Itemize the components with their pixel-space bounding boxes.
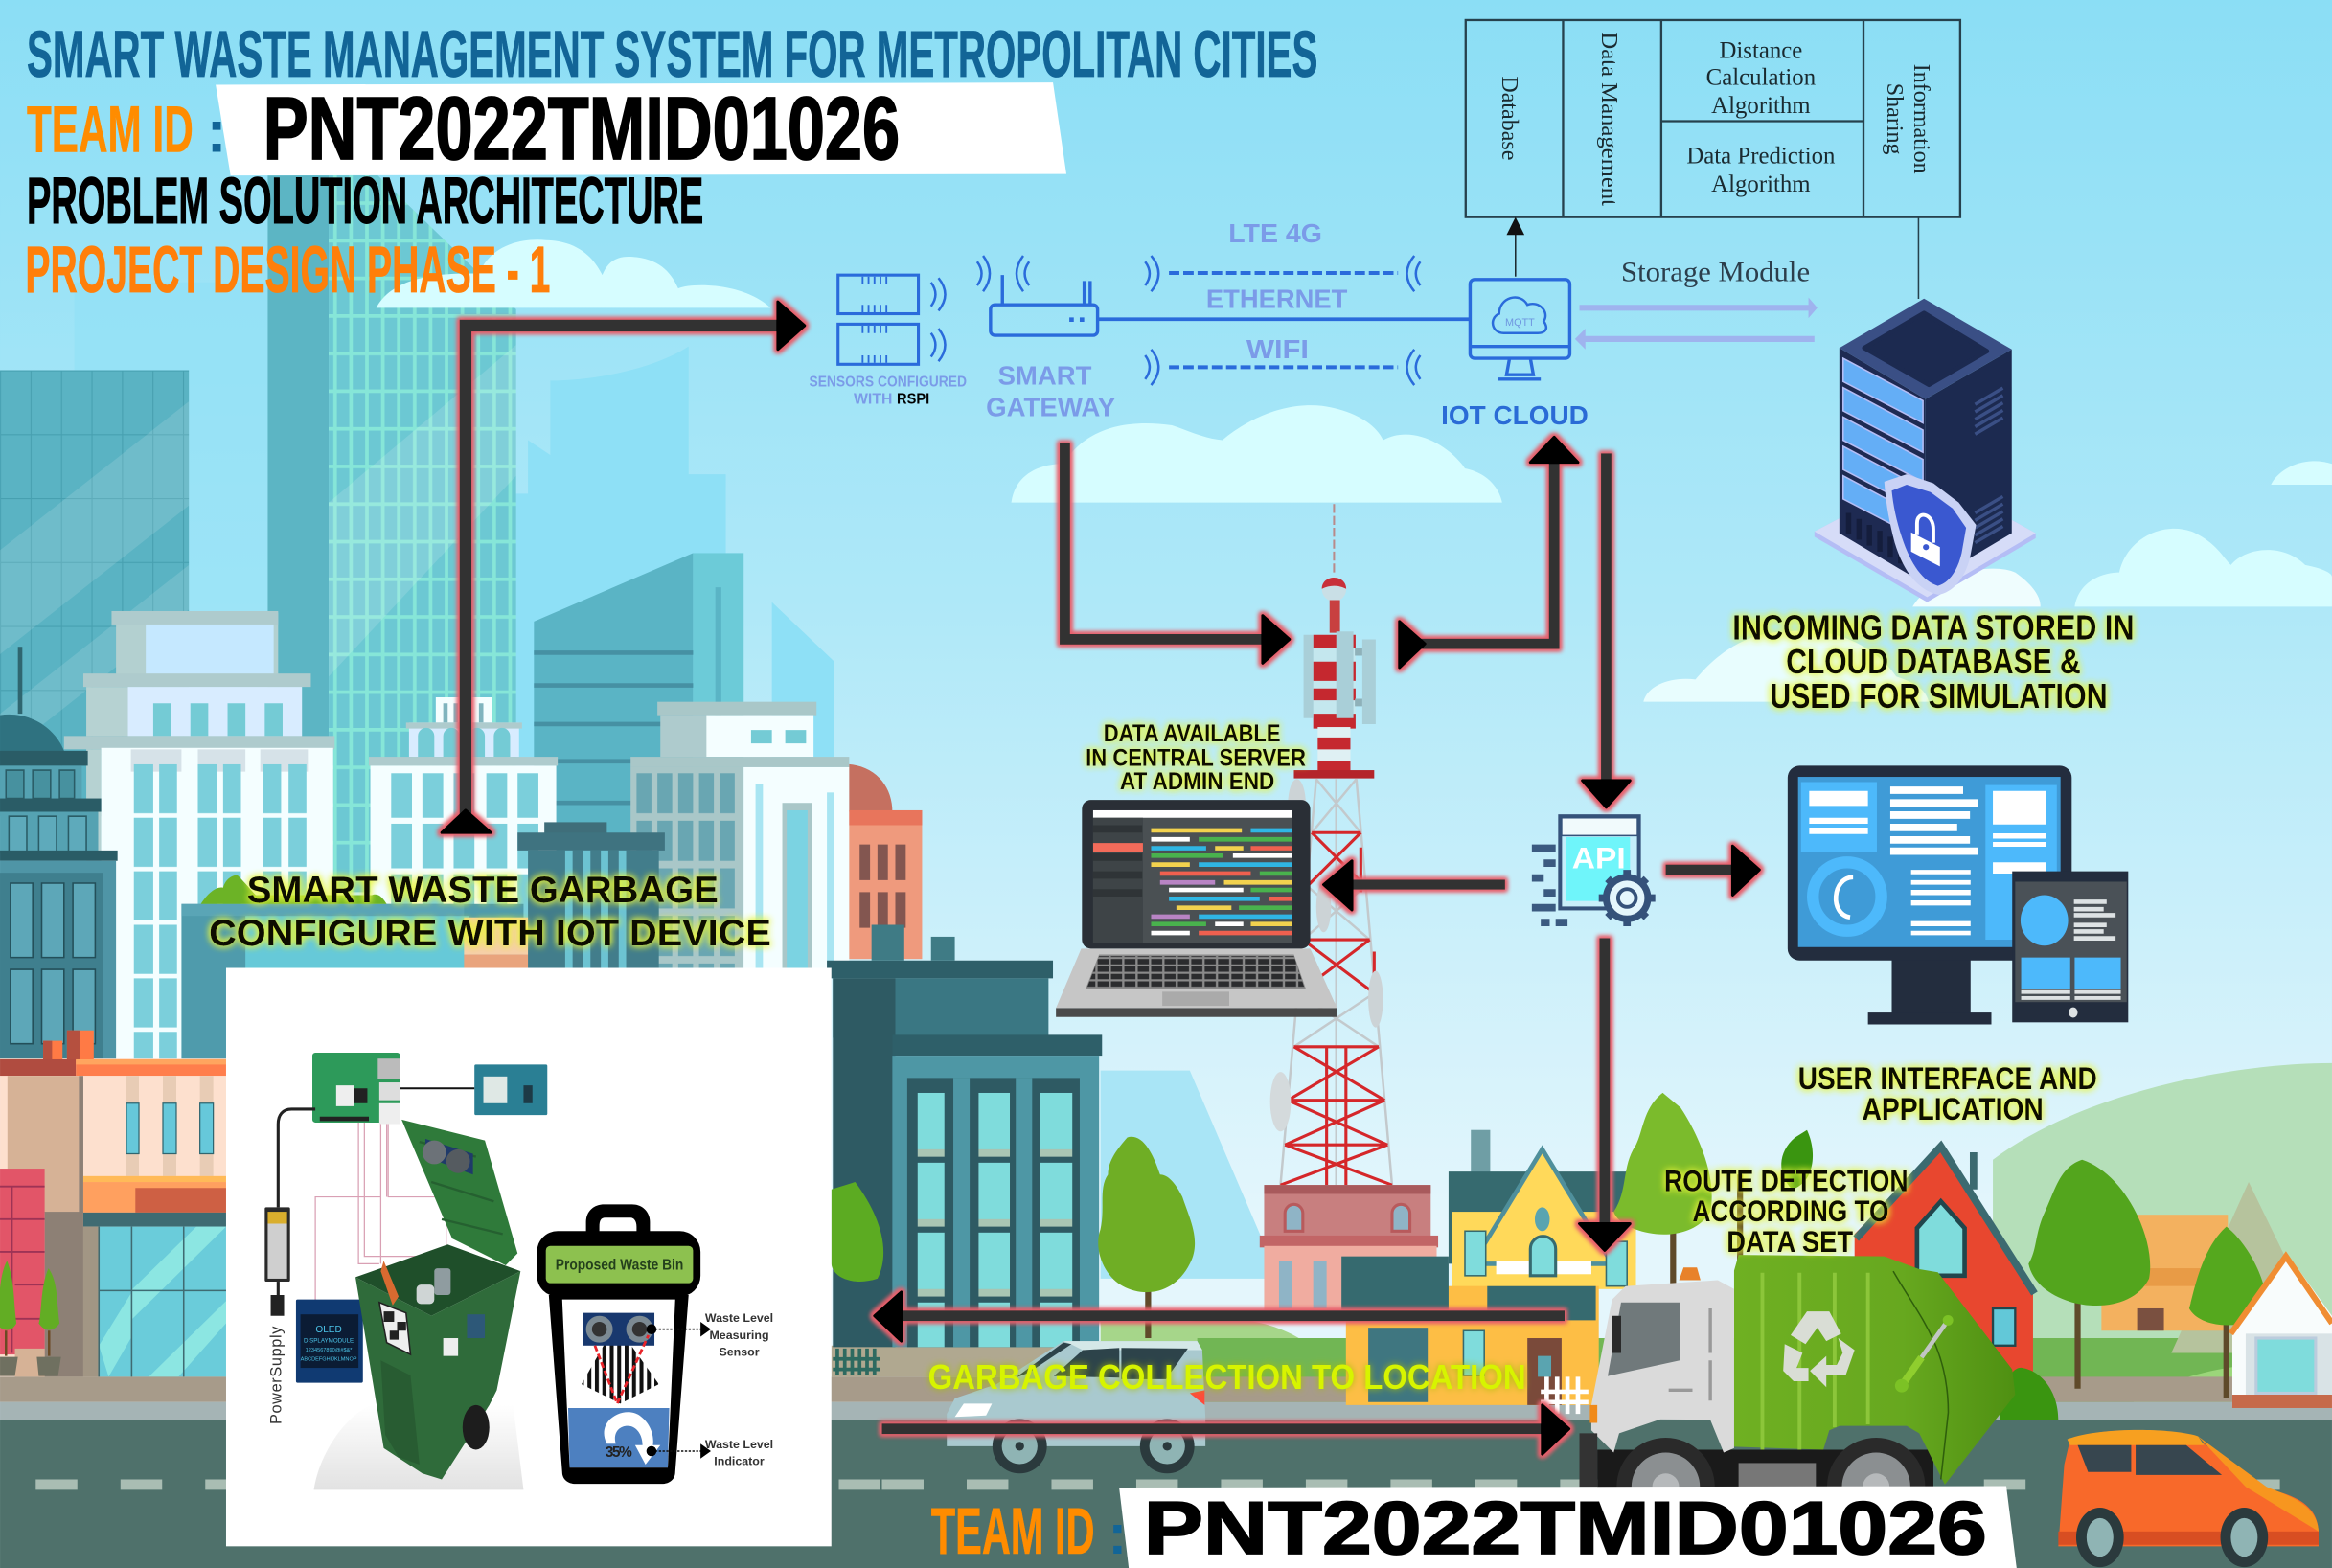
tan wall [8, 1076, 79, 1213]
smart gateway router icon [977, 256, 1470, 335]
laptop with code [1056, 800, 1337, 1017]
route detection caption: DATA SET [1726, 1225, 1853, 1259]
user interface caption [1798, 1060, 2097, 1126]
orange car [2058, 1430, 2319, 1567]
subtitle project design phase: PROJECT DESIGN PHASE - 1 [25, 234, 550, 307]
car windows [1016, 1343, 1188, 1379]
user interface caption: APPLICATION [1862, 1091, 2044, 1126]
orange building [849, 764, 922, 959]
network labels [1206, 218, 1347, 364]
teal tower block [827, 924, 1102, 1376]
garbage collection caption: GARBAGE COLLECTION TO LOCATION [928, 1358, 1526, 1397]
street trees [832, 1093, 2267, 1420]
team id label: TEAM ID [27, 93, 194, 166]
information sharing cell: Information [1909, 64, 1933, 174]
ground and road [0, 1376, 2332, 1568]
user interface caption: USER INTERFACE AND [1798, 1060, 2097, 1096]
sensors configured label: RSPI [897, 391, 929, 407]
power supply label: PowerSupply [267, 1326, 285, 1424]
white house right [2230, 1252, 2332, 1408]
proposed waste bin icon: 35% [606, 1444, 632, 1461]
desktop monitor and tablet [1788, 765, 2128, 1024]
garbage truck [1580, 1255, 2015, 1535]
shield [1885, 474, 1977, 595]
distance algorithm cell: Calculation [1706, 64, 1817, 90]
OLED display: 1234567890@#$&* [306, 1348, 353, 1353]
data management cell: Data Management [1596, 32, 1621, 206]
sensors icon [838, 275, 945, 364]
body ribs [1762, 1273, 1868, 1449]
incoming data caption: INCOMING DATA STORED IN [1732, 608, 2135, 647]
proposed waste bin icon [537, 1204, 711, 1484]
smart waste garbage caption [209, 870, 771, 954]
smart gateway label: GATEWAY [986, 393, 1116, 422]
team id banner background [216, 82, 1066, 175]
network labels: WIFI [1246, 334, 1309, 364]
team id value: PNT2022TMID01026 [263, 79, 900, 178]
red building [0, 1169, 45, 1354]
power cable and adapter [264, 1109, 315, 1316]
information sharing cell [1882, 64, 1933, 174]
chimneys [43, 1031, 94, 1060]
slanted mid building [534, 553, 743, 924]
OLED display: DISPLAYMODULE [304, 1338, 354, 1345]
potted trees [0, 1261, 59, 1329]
laptop base [1056, 948, 1337, 1008]
title: SMART WASTE MANAGEMENT SYSTEM FOR METROPOLITAN CITIES [27, 18, 1317, 91]
glass office tower left [0, 371, 189, 816]
distance algorithm cell: Algorithm [1711, 93, 1811, 119]
incoming data caption: USED FOR SIMULATION [1770, 677, 2108, 716]
indicator lamp [1589, 1405, 1597, 1423]
white building centre [369, 697, 558, 974]
sensors configured label: SENSORS CONFIGURED [809, 375, 967, 391]
wifi module [400, 1064, 547, 1115]
bin shadow [314, 1405, 523, 1489]
network labels: LTE 4G [1228, 218, 1322, 248]
proposed waste bin title: Proposed Waste Bin [556, 1258, 683, 1274]
street hills [1101, 1063, 2332, 1420]
panel: waste bin hardware [226, 968, 832, 1546]
OLED display: ABCDEFGHIJKLMNOP [301, 1356, 357, 1362]
sensors configured label [809, 375, 967, 407]
route detection caption: ROUTE DETECTION [1664, 1164, 1909, 1197]
door details [1669, 1308, 1710, 1400]
sensors configured label: WITH [854, 391, 892, 407]
truck window [1608, 1303, 1680, 1376]
OLED display [296, 1300, 363, 1383]
IoT cloud monitor icon [1470, 280, 1569, 379]
truck underbody [1597, 1449, 1933, 1489]
sensor labels: Measuring [709, 1329, 769, 1342]
truck front wheel [1616, 1438, 1715, 1535]
drive bays [1843, 358, 1923, 540]
white building left [64, 611, 334, 1063]
bottom team id label: TEAM ID [931, 1495, 1094, 1568]
network labels: ETHERNET [1206, 284, 1347, 313]
storage arrows [1575, 297, 1818, 350]
rack vents [1975, 388, 2002, 543]
central server caption: AT ADMIN END [1120, 769, 1274, 795]
smart gateway label: SMART [998, 360, 1091, 390]
information sharing cell: Sharing [1882, 83, 1907, 155]
route detection caption [1664, 1164, 1909, 1259]
green smart bin [355, 1120, 520, 1479]
central server caption: DATA AVAILABLE [1104, 721, 1281, 747]
incoming data caption: CLOUD DATABASE & [1786, 643, 2081, 681]
distance algorithm cell: Distance [1719, 38, 1802, 64]
incoming data caption [1732, 608, 2135, 716]
arrow: truck to left [875, 1292, 1565, 1341]
code lines [1151, 829, 1292, 935]
low teal buildings [181, 822, 665, 1061]
pink building [1260, 1185, 1438, 1320]
sensor labels: Sensor [719, 1346, 760, 1359]
clouds [1012, 405, 2332, 702]
storage module label: Storage Module [1621, 257, 1810, 287]
smart waste garbage caption: SMART WASTE GARBAGE [247, 870, 719, 911]
line: table to server [1917, 217, 1919, 299]
arrow: bin to sensors [442, 302, 805, 832]
API gear icon [1532, 816, 1656, 926]
car wheels [993, 1419, 1195, 1473]
bottom team id value: PNT2022TMID01026 [1144, 1488, 1987, 1568]
headlight [955, 1403, 992, 1417]
flow arrows [442, 302, 1759, 1454]
coloured wires [315, 1123, 449, 1308]
arrow: API to laptop [1324, 861, 1505, 910]
mast [1333, 504, 1335, 576]
platform [1815, 473, 2036, 602]
red house [1855, 1147, 2035, 1375]
distance algorithm cell [1706, 38, 1817, 119]
subtitle problem solution architecture: PROBLEM SOLUTION ARCHITECTURE [27, 165, 703, 238]
team id colon: : [207, 99, 226, 165]
yellow house [1341, 1130, 1636, 1405]
bottom team id banner background [1119, 1486, 2017, 1568]
white building right [630, 702, 849, 975]
truck cab [1591, 1280, 1734, 1453]
central server caption [1086, 721, 1306, 795]
smart gateway label [986, 360, 1116, 422]
truck green body [1734, 1255, 2015, 1485]
arrow: cloud to API [1583, 453, 1630, 807]
truck rear wheel [1827, 1438, 1925, 1535]
beacon [1680, 1267, 1701, 1280]
lattice [1281, 779, 1392, 1185]
raspberry pi board [312, 1053, 400, 1124]
prediction algorithm cell: Algorithm [1711, 171, 1811, 197]
central skyscraper [267, 175, 516, 892]
far background buildings [0, 283, 1279, 1279]
dark teal dome building left [0, 647, 118, 1061]
arrow: cloud to database [1506, 217, 1524, 277]
padlock [1911, 533, 1940, 566]
arrow: API to route detection [1580, 938, 1630, 1250]
arrow: gateway to tower [1064, 443, 1290, 663]
grey car [947, 1341, 1205, 1473]
sensor labels: Indicator [714, 1455, 765, 1468]
server rack with shield [1815, 299, 2036, 602]
left street buildings [0, 1031, 226, 1376]
laptop screen [1082, 800, 1311, 948]
beacon ball [1322, 577, 1346, 602]
prediction algorithm cell [1686, 144, 1836, 197]
cloud behind project phase [377, 239, 770, 307]
roofline [0, 1059, 76, 1076]
IoT cloud label: IOT CLOUD [1441, 400, 1589, 430]
small orange house [2101, 1215, 2228, 1330]
prediction algorithm cell: Data Prediction [1686, 144, 1836, 170]
sensor labels: Waste Level [705, 1438, 773, 1451]
central server caption: IN CENTRAL SERVER [1086, 745, 1306, 771]
API label: API [1572, 842, 1626, 875]
database modules table [1466, 20, 1960, 217]
arrow: right to truck [882, 1405, 1569, 1454]
OLED display: OLED [315, 1325, 342, 1335]
cell tower [1270, 504, 1392, 1185]
rack faces [1840, 348, 1926, 584]
car body [947, 1341, 1205, 1446]
WiFi wireless link [1145, 350, 1420, 385]
bottom team id colon: : [1108, 1504, 1127, 1566]
IoT cloud monitor icon: MQTT [1505, 317, 1535, 329]
LTE wireless link [1145, 256, 1420, 291]
sensor labels [705, 1311, 773, 1468]
smart waste garbage caption: CONFIGURE WITH IOT DEVICE [209, 913, 771, 954]
database cell: Database [1497, 76, 1521, 160]
truck bumper [1580, 1433, 1597, 1487]
lever [1895, 1315, 1954, 1393]
street fences [833, 1349, 1589, 1414]
sensor labels: Waste Level [705, 1311, 773, 1325]
striped antenna body [1314, 635, 1356, 727]
recycling symbol [1783, 1311, 1855, 1387]
tail light [1190, 1390, 1204, 1405]
route detection caption: ACCORDING TO [1692, 1194, 1888, 1228]
arrow: API to user interface [1666, 846, 1759, 895]
car roof [1063, 1341, 1202, 1350]
arrow: tower to cloud [1400, 437, 1578, 668]
